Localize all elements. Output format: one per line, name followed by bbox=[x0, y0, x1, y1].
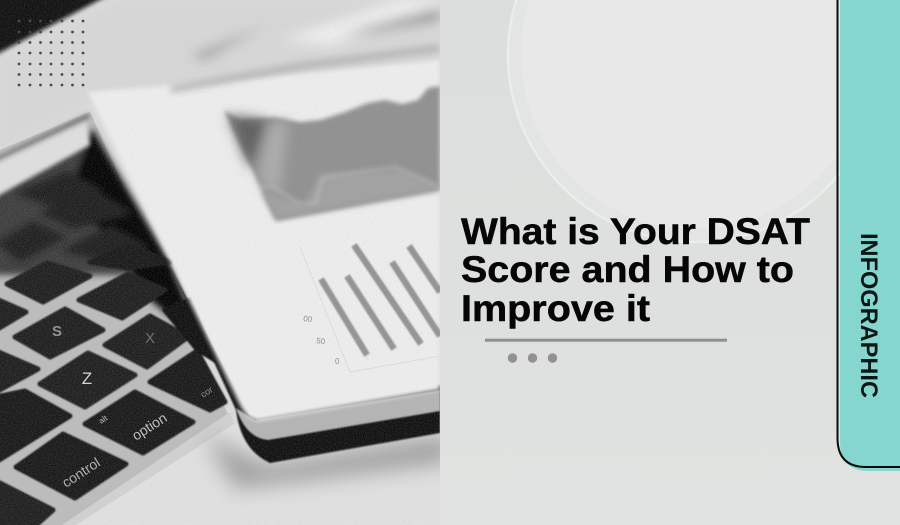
panel: photo of laptop keyboard and tablet chart bbox=[0, 0, 450, 525]
title bbox=[461, 211, 810, 329]
title: Score and How to bbox=[461, 249, 794, 290]
panel: right background bbox=[440, 0, 900, 525]
key labels: S bbox=[52, 323, 62, 340]
tablet area chart bbox=[224, 86, 440, 221]
key labels: cor bbox=[199, 384, 215, 400]
bar chart axis labels: 0 bbox=[335, 357, 340, 366]
tablet metal edge bbox=[236, 390, 440, 440]
keyboard strip blurred bbox=[0, 113, 90, 198]
tablet face bbox=[88, 60, 440, 421]
three dots bbox=[508, 353, 557, 363]
tablet shadow bbox=[205, 435, 450, 488]
dot grid decoration bbox=[18, 20, 84, 86]
table surface bbox=[162, 425, 235, 470]
key labels bbox=[52, 323, 215, 491]
bar chart axis labels: 50 bbox=[316, 336, 326, 346]
tab fill bbox=[840, 0, 900, 471]
keyboard base bbox=[0, 112, 235, 525]
tablet bar chart bbox=[300, 245, 440, 372]
bar chart axis labels: 00 bbox=[303, 314, 313, 324]
key labels: option bbox=[129, 409, 170, 444]
key labels: Z bbox=[82, 369, 92, 388]
key labels: control bbox=[59, 454, 103, 491]
laptop lid blurred surface bbox=[190, 0, 440, 66]
keyboard upper dark area blurred bbox=[0, 126, 188, 325]
tablet underside bbox=[168, 262, 440, 463]
key labels: X bbox=[145, 330, 155, 347]
laptop screen dark corner bbox=[0, 0, 106, 56]
tablet upper blurred highlight and streak bbox=[170, 44, 440, 93]
title: Improve it bbox=[461, 288, 650, 329]
keyboard keys bbox=[0, 173, 225, 525]
keyboard edge highlight bbox=[62, 412, 234, 525]
title: What is Your DSAT bbox=[461, 211, 810, 252]
divider line bbox=[485, 339, 727, 342]
key labels: alt bbox=[97, 413, 110, 426]
decorative circle bbox=[507, 0, 840, 243]
tab label: INFOGRAPHIC bbox=[855, 233, 882, 398]
film grain overlay bbox=[0, 0, 440, 525]
bar chart axis labels bbox=[303, 314, 340, 366]
side tab: infographic bbox=[838, 0, 900, 471]
tab outline bbox=[838, 0, 900, 467]
